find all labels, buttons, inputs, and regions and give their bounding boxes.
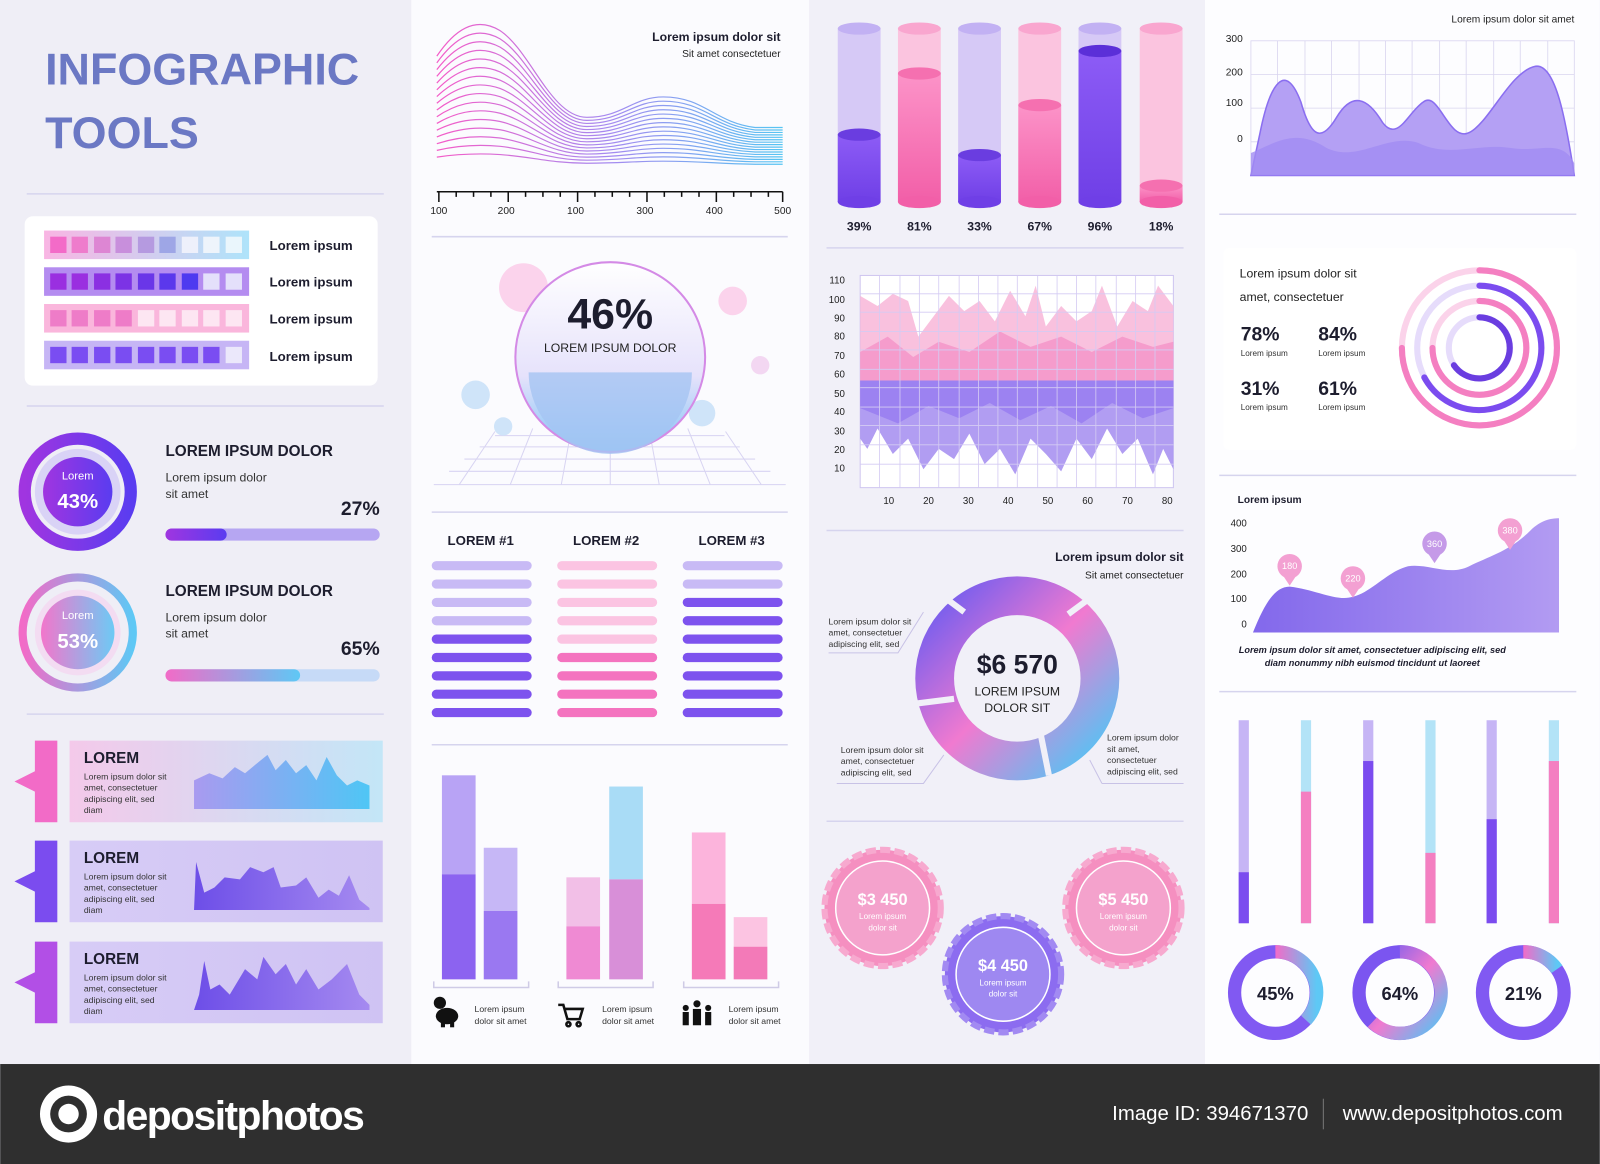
row 1 (44, 231, 249, 259)
chart: mirrored area chart (829, 275, 1173, 507)
badge: $5 450: Lorem ipsum (1100, 912, 1147, 921)
chart: 46% sphere: 46% (567, 290, 653, 338)
panel: donut 53%: Lorem (62, 610, 94, 622)
panel: donut 43%: sit amet (165, 487, 209, 501)
footer bar: depositphotos (102, 1092, 364, 1138)
chart: grouped bars with icons: dolor sit amet (729, 1016, 781, 1026)
chart: three lorem bar lists (432, 533, 783, 717)
chart: area with pins: 200 (1231, 569, 1247, 580)
icon: cart (558, 1005, 583, 1026)
chart: top-right area: 200 (1226, 67, 1243, 78)
panel: stats card with rings: Lorem ipsum (1318, 403, 1366, 412)
chart: mirrored area chart: 80 (1162, 496, 1173, 507)
panel: card 3: amet, consectetuer (84, 984, 158, 994)
chart: $6 570 donut: $6 570 (977, 649, 1058, 679)
chart: mirrored area chart: 10 (834, 463, 845, 474)
panel: card 1: LOREM (84, 750, 139, 767)
labels (270, 238, 353, 364)
chart: wave lines: Lorem ipsum dolor sit (652, 30, 781, 44)
panel: card 3: Lorem ipsum dolor sit (84, 972, 167, 982)
panel: donut 53% (23, 577, 380, 688)
footer bar: Image ID: 394671370 (1112, 1103, 1308, 1125)
row 2 (44, 267, 249, 296)
chart: $6 570 donut: amet, consectetuer (841, 756, 915, 766)
badge: $4 450: Lorem ipsum (979, 978, 1027, 987)
panel: stats card with rings (1223, 248, 1576, 450)
labels: Lorem ipsum (270, 349, 353, 364)
chart: area with pins (1231, 495, 1559, 668)
chart: mirrored area chart: 20 (923, 496, 935, 507)
chart: cylinders: 96% (1088, 220, 1112, 234)
panel: stats card with rings: Lorem ipsum (1241, 349, 1288, 358)
chart: cylinders: 81% (907, 220, 932, 234)
panel: donut 43%: Lorem (62, 470, 94, 482)
pin 380: 380 (1502, 526, 1518, 536)
panel: donut 43% (25, 439, 380, 545)
chart: $6 570 donut (829, 550, 1184, 783)
row 3 (44, 304, 249, 333)
chart: cylinders (838, 22, 1183, 234)
chart: wave lines: 100 (430, 206, 448, 217)
chart: wave lines: 200 (498, 206, 515, 217)
chart: mirrored area chart: 70 (834, 351, 845, 362)
chart: $6 570 donut: adipiscing elit, sed (829, 639, 899, 649)
chart: mirrored area chart: 70 (1122, 496, 1133, 507)
chart: three lorem bar lists: LOREM #2 (573, 533, 639, 548)
panel: donut 43%: 43% (57, 491, 98, 513)
badge: $5 450: $5 450 (1098, 891, 1148, 909)
chart: wave lines: Sit amet consectetuer (682, 49, 781, 60)
chart: mirrored area chart: 110 (829, 276, 845, 287)
chart: top-right area: 300 (1226, 34, 1243, 45)
panel: card 2: amet, consectetuer (84, 883, 158, 893)
chart: mirrored area chart: 10 (883, 496, 895, 507)
chart: three percentage rings: 21% (1505, 983, 1542, 1004)
chart: mirrored area chart: 20 (834, 445, 845, 456)
chart: wave lines: 500 (774, 206, 791, 217)
chart: $6 570 donut: adipiscing elit, sed (841, 767, 912, 777)
panel: card 2: Lorem ipsum dolor sit (84, 871, 167, 881)
chart: mirrored area chart: 100 (829, 295, 845, 306)
badge: $5 450: dolor sit (1109, 923, 1138, 932)
chart: wave lines (430, 24, 791, 217)
panel: stats card with rings: 84% (1318, 324, 1357, 346)
badges (824, 850, 1182, 1032)
labels: Lorem ipsum (270, 275, 353, 290)
panel: stats card with rings: Lorem ipsum dolor sit (1240, 266, 1357, 280)
panel: stats card with rings: 78% (1241, 324, 1279, 346)
badge: $3 450: $3 450 (858, 891, 908, 909)
chart: $6 570 donut: Lorem ipsum dolor sit (829, 616, 912, 626)
chart: cylinders: 18% (1149, 220, 1173, 234)
panel: stats card with rings: Lorem ipsum (1318, 349, 1366, 358)
chart: wave lines: 300 (636, 206, 654, 217)
chart: grouped bars with icons (434, 775, 781, 1027)
panel: card 3: adipiscing elit, sed (84, 995, 155, 1005)
chart: cylinders: 39% (847, 220, 872, 234)
chart: top-right area (1226, 14, 1574, 175)
badge: $3 450: Lorem ipsum (859, 912, 906, 921)
chart: 46% sphere: LOREM IPSUM DOLOR (544, 341, 677, 355)
panel: progress squares card (25, 216, 378, 386)
chart: area with pins: Lorem ipsum dolor sit amet, consectetuer adipiscing elit, sed (1239, 645, 1506, 655)
row 4 (44, 341, 249, 369)
chart: $6 570 donut: Lorem ipsum dolor (1107, 733, 1179, 743)
badge: $3 450 (824, 850, 941, 966)
chart: cylinders: 67% (1027, 220, 1052, 234)
pin 360: 360 (1427, 539, 1442, 549)
panel: donut 43%: Lorem ipsum dolor (165, 471, 267, 485)
chart: $6 570 donut: Lorem ipsum dolor sit (841, 745, 924, 755)
chart: mirrored area chart: 50 (834, 389, 845, 400)
chart: grouped bars with icons: Lorem ipsum (475, 1004, 525, 1014)
chart: area with pins: 400 (1231, 518, 1247, 529)
panel: donut 53%: Lorem ipsum dolor (165, 610, 267, 624)
title: INFOGRAPHIC (45, 44, 359, 95)
panel: donut 53%: 53% (57, 631, 98, 653)
footer bar: www.depositphotos.com (1342, 1103, 1563, 1125)
panel: donut 53%: LOREM IPSUM DOLOR (165, 583, 333, 600)
panel: stats card with rings: Lorem ipsum (1241, 403, 1288, 412)
chart: $6 570 donut: sit amet, (1107, 744, 1140, 754)
chart: area with pins: 300 (1231, 544, 1247, 555)
panel: donut 53%: 65% (341, 638, 380, 660)
chart: $6 570 donut: amet, consectetuer (829, 628, 902, 638)
chart: three lorem bar lists: LOREM #1 (448, 533, 514, 548)
chart: mirrored area chart: 50 (1043, 496, 1054, 507)
chart: $6 570 donut: consectetuer (1107, 755, 1157, 765)
badge: $4 450: dolor sit (989, 990, 1018, 999)
panel: card 1 (14, 741, 383, 822)
panel: stats card with rings: 31% (1241, 378, 1279, 400)
badge: $5 450 (1065, 850, 1182, 966)
panel: stats card with rings: amet, consectetuer (1240, 290, 1344, 304)
chart: area with pins: Lorem ipsum (1238, 495, 1302, 506)
icon: camera logo (40, 1085, 97, 1143)
chart: grouped bars with icons: Lorem ipsum (729, 1004, 779, 1014)
panel: card 1: amet, consectetuer (84, 783, 158, 793)
chart: $6 570 donut: Sit amet consectetuer (1085, 570, 1184, 581)
title: TOOLS (45, 107, 199, 158)
badge: $4 450: $4 450 (978, 957, 1028, 975)
chart: three percentage rings: 45% (1257, 983, 1294, 1004)
badge: $3 450: dolor sit (868, 923, 898, 932)
badge: $4 450 (945, 916, 1061, 1032)
chart: mirrored area chart: 30 (834, 427, 845, 438)
pin 180 (1277, 554, 1302, 586)
pin 220: 220 (1345, 573, 1361, 583)
chart: mirrored area chart: 30 (963, 496, 974, 507)
chart: mirrored area chart: 80 (834, 332, 845, 343)
chart: mirrored area chart: 90 (834, 313, 845, 324)
chart: three percentage rings (1235, 952, 1564, 1033)
chart: cylinders: 33% (967, 220, 992, 234)
chart: area with pins: diam nonummy nibh euismod tincidunt ut laoreet (1265, 658, 1481, 668)
panel: card 2: LOREM (84, 850, 139, 867)
chart: mirrored area chart: 60 (834, 369, 845, 380)
labels: Lorem ipsum (270, 238, 353, 253)
chart: $6 570 donut: LOREM IPSUM (974, 685, 1060, 699)
chart: three percentage rings: 64% (1381, 983, 1418, 1004)
pin 180: 180 (1282, 561, 1297, 571)
chart: three lorem bar lists: LOREM #3 (699, 533, 765, 548)
panel: card 1: diam (84, 805, 103, 815)
pin 220 (1341, 566, 1365, 598)
chart: mirrored area chart: 60 (1082, 496, 1094, 507)
panel: donut 53%: sit amet (165, 627, 209, 641)
pin 360 (1422, 532, 1447, 563)
panel: card 1: Lorem ipsum dolor sit (84, 771, 167, 781)
panel: donut 43%: 27% (341, 498, 380, 520)
chart: wave lines: 400 (706, 206, 723, 217)
chart: area with pins: 100 (1231, 594, 1247, 605)
icon: people (683, 1000, 711, 1025)
chart: 46% sphere (434, 262, 786, 485)
panel: card 2 (14, 841, 383, 922)
panel: card 1: adipiscing elit, sed (84, 794, 155, 804)
title (45, 44, 359, 158)
chart: grouped bars with icons: dolor sit amet (475, 1016, 527, 1026)
panel: card 2: diam (84, 905, 103, 915)
chart: mirrored area chart: 40 (1003, 496, 1014, 507)
pin 380 (1498, 518, 1522, 550)
chart: top-right area: Lorem ipsum dolor sit amet (1451, 14, 1574, 25)
chart: top-right area: 100 (1226, 98, 1243, 109)
chart: wave lines: 100 (567, 206, 584, 217)
chart: mirrored area chart: 40 (834, 407, 845, 418)
chart: area with pins: 0 (1241, 619, 1247, 630)
panel: card 3: LOREM (84, 951, 139, 968)
footer bar (0, 1064, 1600, 1164)
chart: grouped bars with icons: dolor sit amet (602, 1016, 655, 1026)
chart: grouped bars with icons: Lorem ipsum (602, 1004, 652, 1014)
panel: card 3 (14, 942, 383, 1023)
panel: card 2: adipiscing elit, sed (84, 894, 155, 904)
panel: card 3: diam (84, 1006, 103, 1016)
chart: vertical bars (1239, 720, 1559, 923)
chart: top-right area: 0 (1237, 134, 1243, 145)
chart: $6 570 donut: Lorem ipsum dolor sit (1055, 550, 1184, 564)
panel: donut 43%: LOREM IPSUM DOLOR (165, 443, 333, 460)
chart: $6 570 donut: adipiscing elit, sed (1107, 766, 1178, 776)
panel: stats card with rings: 61% (1318, 378, 1357, 400)
chart: $6 570 donut: DOLOR SIT (984, 701, 1051, 715)
labels: Lorem ipsum (270, 311, 353, 326)
icon: piggy bank (434, 997, 458, 1027)
